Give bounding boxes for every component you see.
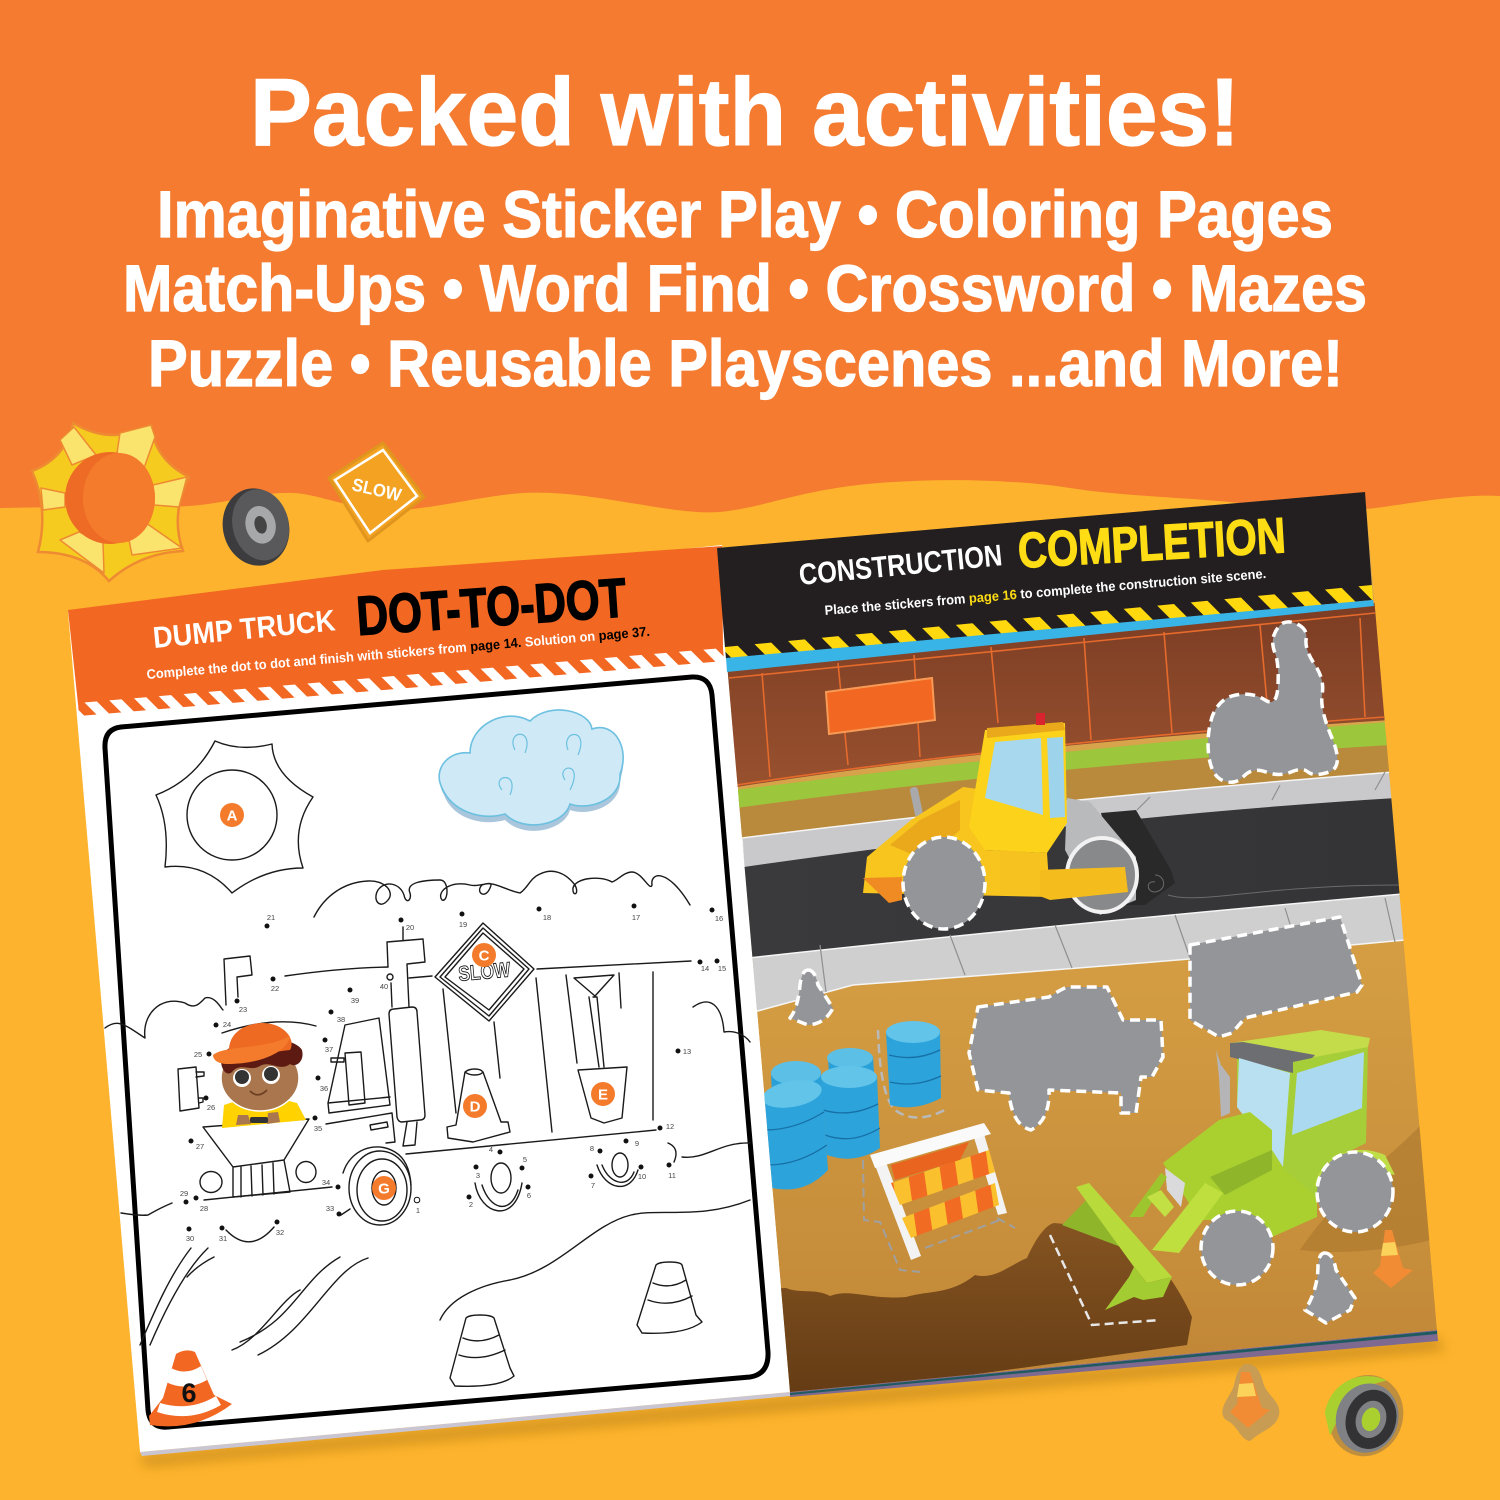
activities list [123,177,1367,400]
dot numbers: 17 [632,913,640,922]
road roller [863,713,1128,903]
dot numbers: 8 [590,1144,594,1153]
heading: dot-to-dot: DOT-TO-DOT [355,566,628,647]
sticker cutout: truck bed [1190,917,1362,1037]
dot numbers: 31 [219,1234,227,1243]
sticker: slow sign: SLOW [350,474,403,505]
wall sign [826,678,935,734]
activities list: Puzzle • Reusable Playscenes ...and More! [148,326,1343,400]
dot numbers: 6 [527,1191,531,1200]
roll spiral and seam [1148,875,1400,898]
ground [717,492,1437,1392]
candy stripe band [78,648,724,716]
letter badge A [220,803,244,827]
loader wheel cutouts [1201,1152,1393,1285]
sticker: wheel [215,481,297,573]
roller wheel cutout [903,837,985,929]
road barricade [863,1123,1015,1272]
dirt strip [735,735,1392,840]
title: Packed with activities! [250,59,1240,166]
loose sticker: cone [1222,1364,1279,1441]
sticker cutout: cone [790,970,833,1025]
brown soil patch [781,1223,1192,1392]
dot numbers: 15 [718,964,726,973]
truck line art [105,871,750,1386]
dot numbers: 37 [325,1045,333,1054]
page number cone [149,1350,232,1426]
asphalt roll [1101,810,1175,905]
heading: dump truck: DUMP TRUCK [151,604,337,655]
letter badges: G [378,1180,390,1198]
sidewalk joints [820,772,1395,992]
right page [717,492,1437,1400]
background yellow wave [0,480,1500,1500]
sign slow text: SLOW [457,959,511,986]
upper sidewalk [742,772,1396,870]
brick wall [720,603,1390,787]
boy sticker [213,1023,306,1128]
dot numbers: 22 [271,984,279,993]
dot numbers: 5 [523,1155,527,1164]
dot numbers: 16 [715,914,723,923]
sticker cutout: cone two [1305,1253,1355,1323]
page number: 6 [181,1378,197,1408]
dot numbers: 23 [239,1005,247,1014]
lower sidewalk [748,894,1405,1012]
dot numbers: 1 [416,1206,420,1215]
dot numbers: 10 [638,1172,646,1181]
activity frame [105,677,768,1427]
dot numbers: 36 [320,1084,328,1093]
letter badges: C [479,948,490,964]
book shadow [140,1338,1445,1466]
dot numbers: 19 [459,920,467,929]
letter badges: D [470,1098,481,1116]
asphalt road [744,798,1402,960]
dot numbers: 26 [207,1103,215,1112]
dot numbers: 3 [476,1171,480,1180]
green loader [1062,1030,1395,1310]
left page header band [68,546,723,704]
left page [68,545,790,1452]
blue band [726,600,1374,672]
heading: completion: COMPLETION [1016,507,1287,579]
dashed bucket outline [1050,1235,1160,1325]
grass strip [735,722,1390,808]
dot numbers: 13 [683,1047,691,1056]
right page header band [717,492,1372,648]
sticker cutout: worker and mixer [1208,622,1337,782]
left page paper [68,545,790,1452]
dots [184,904,720,1232]
outline sun [156,741,313,893]
blue barrels [760,1021,945,1190]
letter badges [372,943,615,1200]
dot numbers: 25 [194,1050,202,1059]
sticker: sun [32,423,189,581]
heading: construction: CONSTRUCTION [797,539,1004,592]
darker ground swath [1300,1120,1432,1252]
dot numbers: 35 [314,1124,322,1133]
hazard stripe band [725,585,1373,659]
dot numbers: 39 [351,996,359,1005]
activities list: Imaginative Sticker Play • Coloring Pages [157,177,1333,251]
traffic cone [1373,1230,1413,1288]
dot numbers: 29 [180,1189,188,1198]
letter badge A: A [227,808,238,824]
sticker: slow sign [329,443,424,541]
sticker cutout: truck [969,987,1163,1130]
dot numbers: 9 [635,1139,639,1148]
instruction text: Complete the dot to dot and finish with stickers from page 14. Solution on page 37. [146,624,650,682]
dot numbers: 27 [196,1142,204,1151]
dot numbers: 24 [223,1020,231,1029]
dot numbers [180,913,726,1243]
dot numbers: 32 [276,1228,284,1237]
roller silver drum band [1065,798,1136,915]
dot numbers: 20 [406,923,414,932]
instruction text: Place the stickers from page 16 to complete the construction site scene. [824,566,1267,618]
dot numbers: 21 [267,913,275,922]
dot numbers: 40 [380,982,388,991]
page stack edges [140,1330,1438,1456]
roller drum [1067,838,1137,912]
dot numbers: 7 [591,1181,595,1190]
dot numbers: 4 [489,1145,493,1154]
dot numbers: 11 [668,1171,676,1180]
dot numbers: 14 [701,964,709,973]
dot numbers: 33 [326,1204,334,1213]
dot numbers: 12 [666,1122,674,1131]
activities list: Match-Ups • Word Find • Crossword • Mazes [123,251,1367,325]
wall trim lines [729,613,1384,785]
dot numbers: 34 [322,1178,330,1187]
dot numbers: 30 [186,1234,194,1243]
dot numbers: 2 [469,1200,473,1209]
dot numbers: 28 [200,1204,208,1213]
dot numbers: 18 [543,913,551,922]
cloud sticker [439,710,623,831]
dot numbers: 38 [337,1015,345,1024]
loose sticker: green tire [1315,1364,1414,1466]
letter badges: E [598,1086,608,1104]
